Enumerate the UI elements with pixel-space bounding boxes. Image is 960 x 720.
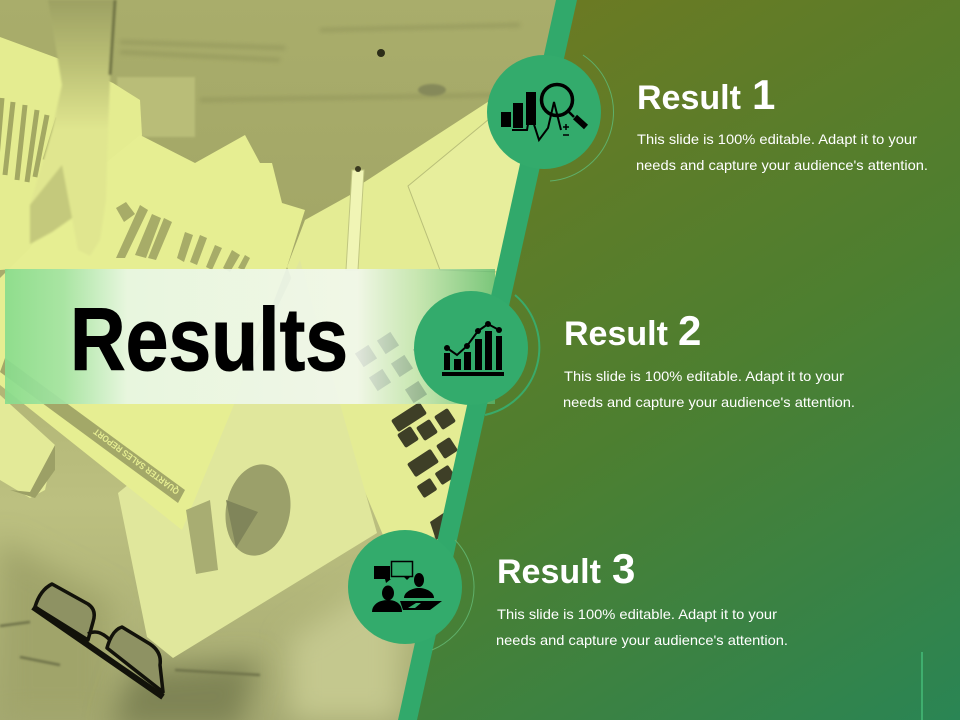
icon: growth chart	[442, 321, 504, 376]
arc 2	[485, 295, 539, 415]
diagonal band	[398, 0, 577, 720]
text 3: This slide is 100% editable. Adapt it to your	[497, 606, 777, 622]
heading 3: Result	[497, 553, 601, 591]
heading 2: 2	[678, 307, 701, 354]
title: Results	[70, 289, 348, 389]
circle 3	[348, 530, 462, 644]
result 3 item	[348, 530, 788, 650]
text 1: This slide is 100% editable. Adapt it to your	[637, 131, 917, 147]
circle 2	[414, 291, 528, 405]
text 1: needs and capture your audience's attention.	[636, 157, 928, 173]
text 2: This slide is 100% editable. Adapt it to your	[564, 368, 844, 384]
icon: bars and magnifier	[501, 84, 586, 140]
glasses	[33, 584, 163, 697]
title banner	[5, 269, 495, 404]
accent line bottom right	[921, 652, 923, 720]
desk photo	[0, 0, 560, 720]
heading 1: Result	[637, 79, 741, 117]
text 3: needs and capture your audience's attention.	[496, 632, 788, 648]
circle 1	[487, 55, 601, 169]
text 2: needs and capture your audience's attention.	[563, 394, 855, 410]
result 1 item	[487, 55, 928, 181]
heading 3: 3	[612, 545, 635, 592]
result 2 item	[414, 291, 855, 415]
upside-down report label: QUARTER SALES REPORT	[91, 426, 181, 496]
heading 1: 1	[752, 71, 775, 118]
heading 2: Result	[564, 315, 668, 353]
icon: meeting people	[372, 562, 442, 612]
arc 3	[432, 540, 474, 650]
arm and hand	[30, 0, 115, 256]
arc 1	[550, 55, 613, 181]
